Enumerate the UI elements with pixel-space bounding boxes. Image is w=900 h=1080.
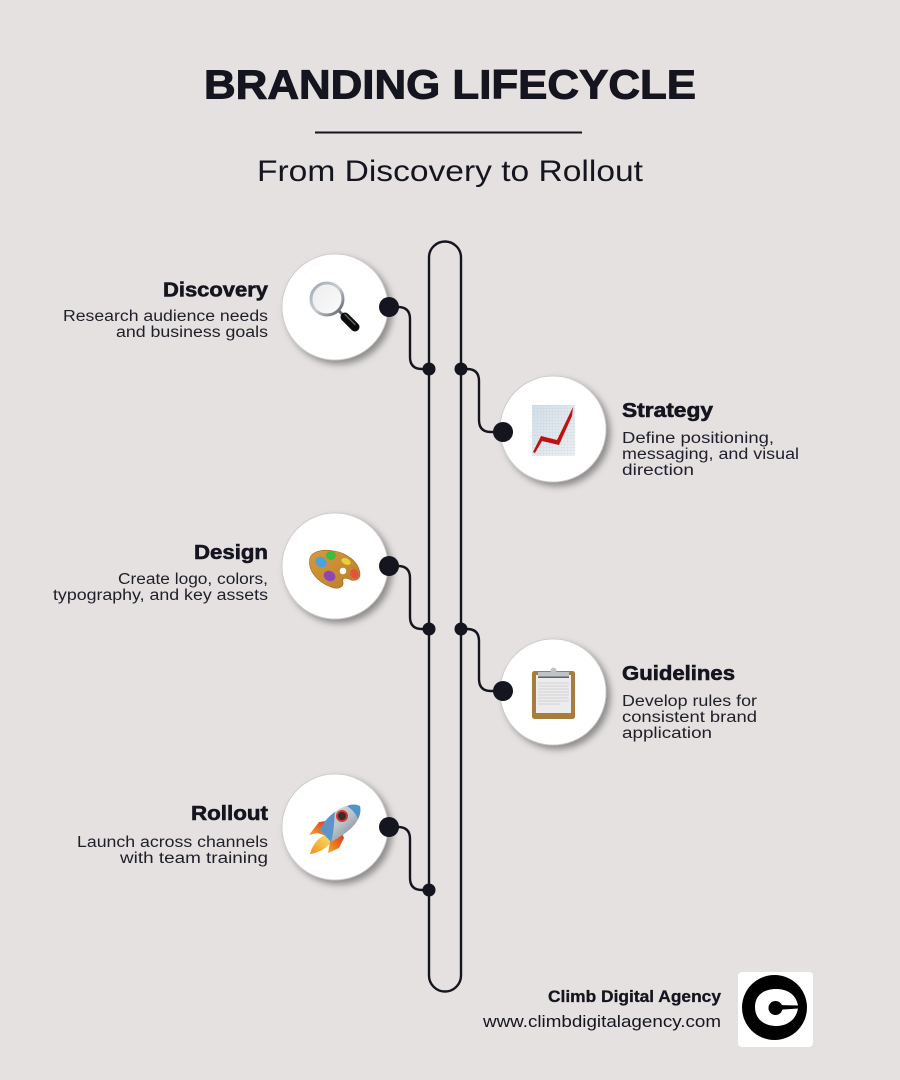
timeline track and connectors <box>389 242 503 992</box>
icon: clipboard <box>532 668 575 719</box>
discovery description <box>63 308 268 341</box>
panel: discovery <box>63 254 388 360</box>
footer agency name: Climb Digital Agency <box>548 987 722 1006</box>
rollout description: with team training <box>119 850 268 867</box>
design description: Create logo, colors, <box>118 571 268 588</box>
design heading: Design <box>194 541 268 564</box>
footer website: www.climbdigitalagency.com <box>482 1012 721 1031</box>
icon: chart <box>532 405 575 456</box>
icon: palette <box>309 550 360 588</box>
rollout heading: Rollout <box>191 802 268 825</box>
guidelines circle <box>500 639 606 745</box>
icon: rocket <box>309 804 360 854</box>
discovery heading: Discovery <box>163 278 269 302</box>
guidelines description: application <box>622 725 712 742</box>
rollout description: Launch across channels <box>77 834 268 851</box>
guidelines description: Develop rules for <box>622 693 757 710</box>
design description: typography, and key assets <box>53 587 268 604</box>
rollout description <box>77 834 268 867</box>
strategy description: Define positioning, <box>622 430 774 447</box>
discovery description: and business goals <box>116 324 268 341</box>
guidelines description <box>622 693 757 742</box>
panel: rollout <box>77 774 388 880</box>
logo <box>738 972 813 1047</box>
design circle <box>282 513 388 619</box>
guidelines heading: Guidelines <box>622 662 735 685</box>
strategy circle <box>500 376 606 482</box>
discovery description: Research audience needs <box>63 308 268 325</box>
discovery circle <box>282 254 388 360</box>
rollout circle <box>282 774 388 880</box>
panel: design <box>53 513 388 619</box>
connector dots <box>379 297 513 896</box>
strategy description: direction <box>622 462 694 479</box>
strategy description <box>622 430 799 479</box>
icon: magnifying glass <box>311 283 355 327</box>
title: BRANDING LIFECYCLE <box>204 62 696 108</box>
design description <box>53 571 268 604</box>
guidelines description: consistent brand <box>622 709 757 726</box>
subtitle: From Discovery to Rollout <box>257 155 644 188</box>
panel: guidelines <box>500 639 757 745</box>
strategy heading: Strategy <box>622 399 714 422</box>
panel: strategy <box>500 376 799 482</box>
strategy description: messaging, and visual <box>622 446 799 463</box>
